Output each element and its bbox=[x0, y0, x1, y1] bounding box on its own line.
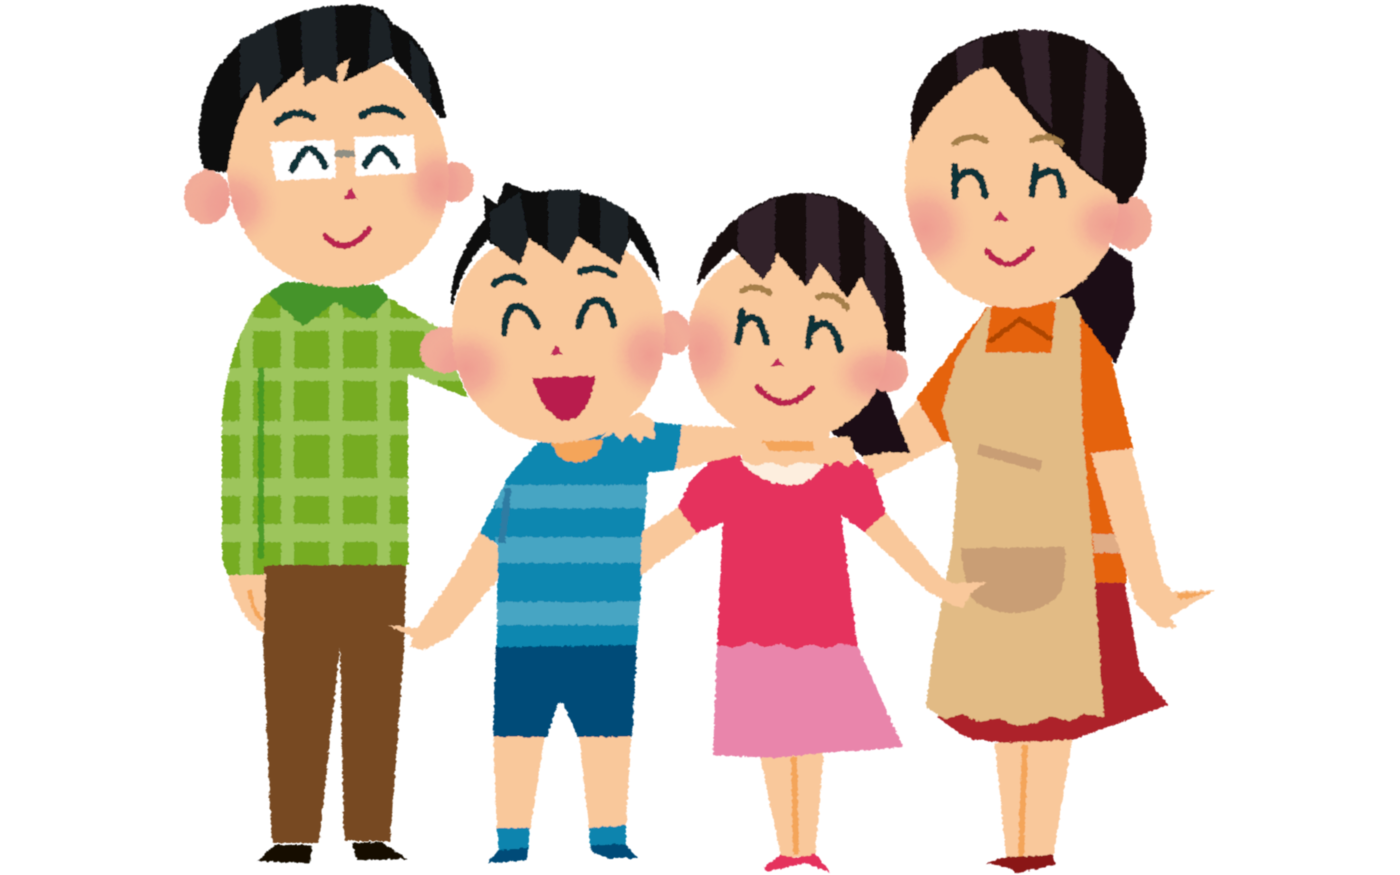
girl: ear bbox=[868, 350, 908, 392]
illustration: happy family of four bbox=[183, 3, 1215, 874]
father: collar bbox=[267, 282, 389, 327]
girl: face bbox=[688, 245, 887, 440]
father bbox=[180, 5, 480, 863]
girl: legs bbox=[760, 750, 824, 857]
girl: white collar bbox=[741, 460, 824, 485]
boy: hair bbox=[451, 182, 660, 305]
father: glasses bbox=[270, 135, 416, 181]
boy: striped shirt bbox=[480, 421, 683, 648]
mother: ear bbox=[1104, 196, 1152, 250]
boy: necklace band on girl bbox=[762, 441, 815, 451]
girl: back hair bbox=[820, 375, 911, 456]
girl bbox=[640, 193, 986, 872]
mother: apron line bbox=[978, 449, 1041, 466]
father: ears bbox=[184, 162, 474, 224]
mother bbox=[862, 30, 1215, 873]
father: thumb line bbox=[250, 590, 262, 620]
boy: face bbox=[452, 230, 665, 443]
mother: collar fold bbox=[989, 319, 1052, 342]
father: cheeks bbox=[214, 150, 458, 236]
mother: ponytail bbox=[1060, 240, 1135, 363]
father: hair highlights bbox=[240, 6, 432, 108]
mother: cheeks bbox=[906, 188, 1127, 266]
girl: eyebrows bbox=[742, 287, 847, 308]
mother: eyebrows bbox=[954, 137, 1061, 143]
father: trousers bbox=[263, 565, 406, 843]
boy: shoes bbox=[487, 844, 638, 863]
mother: orange collar bbox=[985, 302, 1056, 353]
boy head and arm bbox=[416, 182, 857, 470]
father: hand bbox=[228, 573, 266, 634]
mother: legs bbox=[995, 740, 1072, 857]
girl: hair side bbox=[875, 288, 905, 352]
girl: cheeks bbox=[688, 308, 896, 402]
girl: neck bbox=[735, 430, 830, 486]
boy: cheeks bbox=[448, 320, 671, 400]
girl: leg line bbox=[794, 757, 796, 855]
mother: fingers bbox=[1176, 592, 1212, 600]
mother: hair bbox=[911, 30, 1146, 205]
boy: ears bbox=[420, 311, 690, 373]
father: eyes bbox=[292, 148, 397, 170]
mother: arm toward girl bbox=[862, 400, 948, 480]
mother: apron bbox=[926, 297, 1104, 726]
boy: eyebrows bbox=[494, 269, 614, 284]
mother: right arm bbox=[1091, 449, 1215, 628]
mother: waist band bbox=[1092, 534, 1122, 553]
mother: nose bbox=[993, 211, 1009, 221]
father: nose bbox=[343, 188, 358, 199]
father: hair bbox=[199, 5, 446, 172]
mother: shirt bbox=[916, 307, 1133, 587]
girl: nose bbox=[771, 358, 784, 366]
mother: leg line bbox=[1021, 745, 1025, 857]
boy: right arm over girl bbox=[675, 425, 857, 470]
boy: left arm bbox=[388, 531, 500, 650]
girl: right arm and hand bbox=[864, 512, 986, 608]
girl: hair bbox=[697, 193, 905, 352]
girl: shoes bbox=[764, 853, 830, 872]
boy: neck bbox=[551, 440, 603, 462]
father: face bbox=[227, 52, 449, 287]
mother: apron pocket bbox=[961, 547, 1065, 613]
mother: shoes bbox=[986, 855, 1055, 873]
girl: skirt bbox=[713, 642, 903, 758]
girl: eyes bbox=[738, 311, 840, 350]
mother: eyes bbox=[955, 166, 1063, 196]
mother: hair highlights bbox=[956, 30, 1108, 183]
boy: nose bbox=[550, 345, 563, 355]
boy body bbox=[388, 410, 690, 863]
boy: socks bbox=[497, 825, 626, 851]
father: eyebrows bbox=[277, 108, 402, 122]
mother: mouth bbox=[987, 249, 1032, 264]
father: shoes bbox=[257, 842, 407, 863]
girl: top of dress bbox=[678, 448, 886, 650]
boy: shorts bbox=[493, 642, 637, 737]
father: hand on boy shoulder bbox=[600, 412, 655, 443]
girl: left arm bbox=[640, 506, 698, 576]
girl: mouth bbox=[757, 387, 812, 403]
mother: skirt bbox=[937, 583, 1168, 745]
boy: eyes bbox=[504, 300, 614, 333]
boy: open mouth bbox=[532, 376, 595, 421]
girl: hair highlights bbox=[738, 193, 885, 318]
father: plaid shirt bbox=[215, 280, 475, 580]
mother: face bbox=[905, 65, 1119, 308]
boy: legs bbox=[493, 735, 631, 830]
boy: hair highlights bbox=[490, 190, 628, 265]
father: mouth bbox=[325, 229, 369, 245]
